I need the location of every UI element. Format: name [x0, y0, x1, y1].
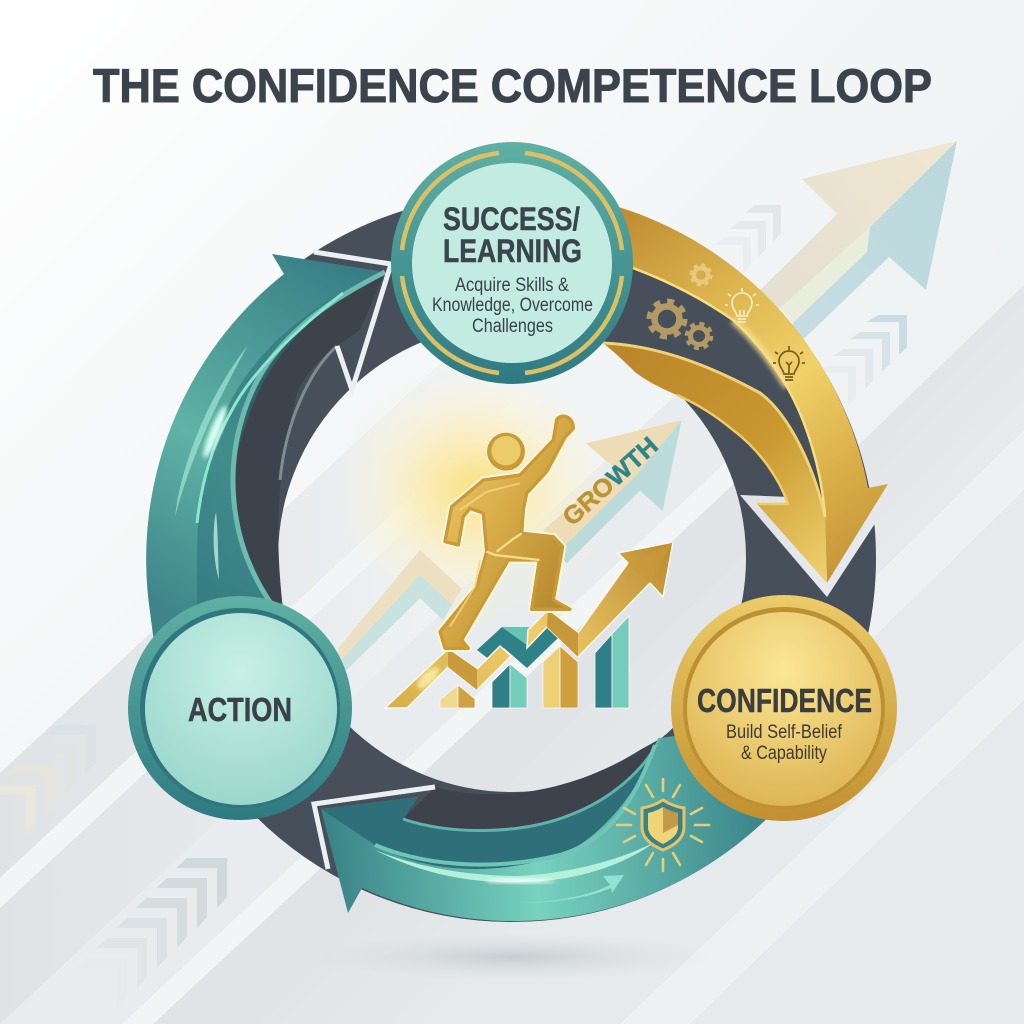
- arrow outline: teal bottom head: [314, 787, 435, 869]
- background chevrons: [0, 205, 907, 1008]
- icon: small gear: [686, 324, 712, 348]
- icon: shield: [617, 779, 709, 871]
- teal trend band: [477, 627, 558, 668]
- background growth arrow: [740, 141, 957, 357]
- node text: success / learning: Challenges: [472, 316, 553, 337]
- background zigzag and growth arrow: [338, 420, 682, 678]
- node: action: [128, 596, 352, 820]
- node text: success / learning: Knowledge, Overcome: [432, 295, 593, 316]
- node heading: confidence: CONFIDENCE: [697, 682, 872, 719]
- arrow: success to confidence (gold): [603, 205, 888, 583]
- node heading: success / learning: SUCCESS/: [443, 201, 580, 237]
- title: THE CONFIDENCE COMPETENCE LOOP: [93, 59, 932, 112]
- ground shadow: [307, 933, 717, 981]
- arrow: confidence to action (teal): [321, 720, 790, 921]
- node: confidence: [671, 595, 897, 821]
- gold climbing figure: [440, 416, 573, 648]
- bar chart: [440, 616, 629, 708]
- growth label: GROWTH: [557, 432, 664, 531]
- node heading: action: ACTION: [188, 691, 292, 728]
- gold trend arrow: [385, 542, 673, 708]
- node text: confidence: & Capability: [741, 743, 827, 764]
- inner glow: [335, 365, 615, 615]
- arrow outline: teal left head: [314, 252, 391, 390]
- dark ring: [213, 259, 811, 857]
- icon: large gear: [649, 301, 685, 337]
- icon: light bulb white: [725, 288, 759, 322]
- node text: success / learning: Acquire Skills &: [455, 275, 569, 296]
- icon: light bulb dark: [773, 346, 805, 380]
- node text: confidence: Build Self-Belief: [726, 722, 843, 743]
- node: success / learning: [391, 142, 633, 384]
- icon: faint gear: [691, 265, 711, 285]
- node heading: success / learning: LEARNING: [443, 233, 582, 269]
- arrow: action to success (teal): [146, 254, 385, 650]
